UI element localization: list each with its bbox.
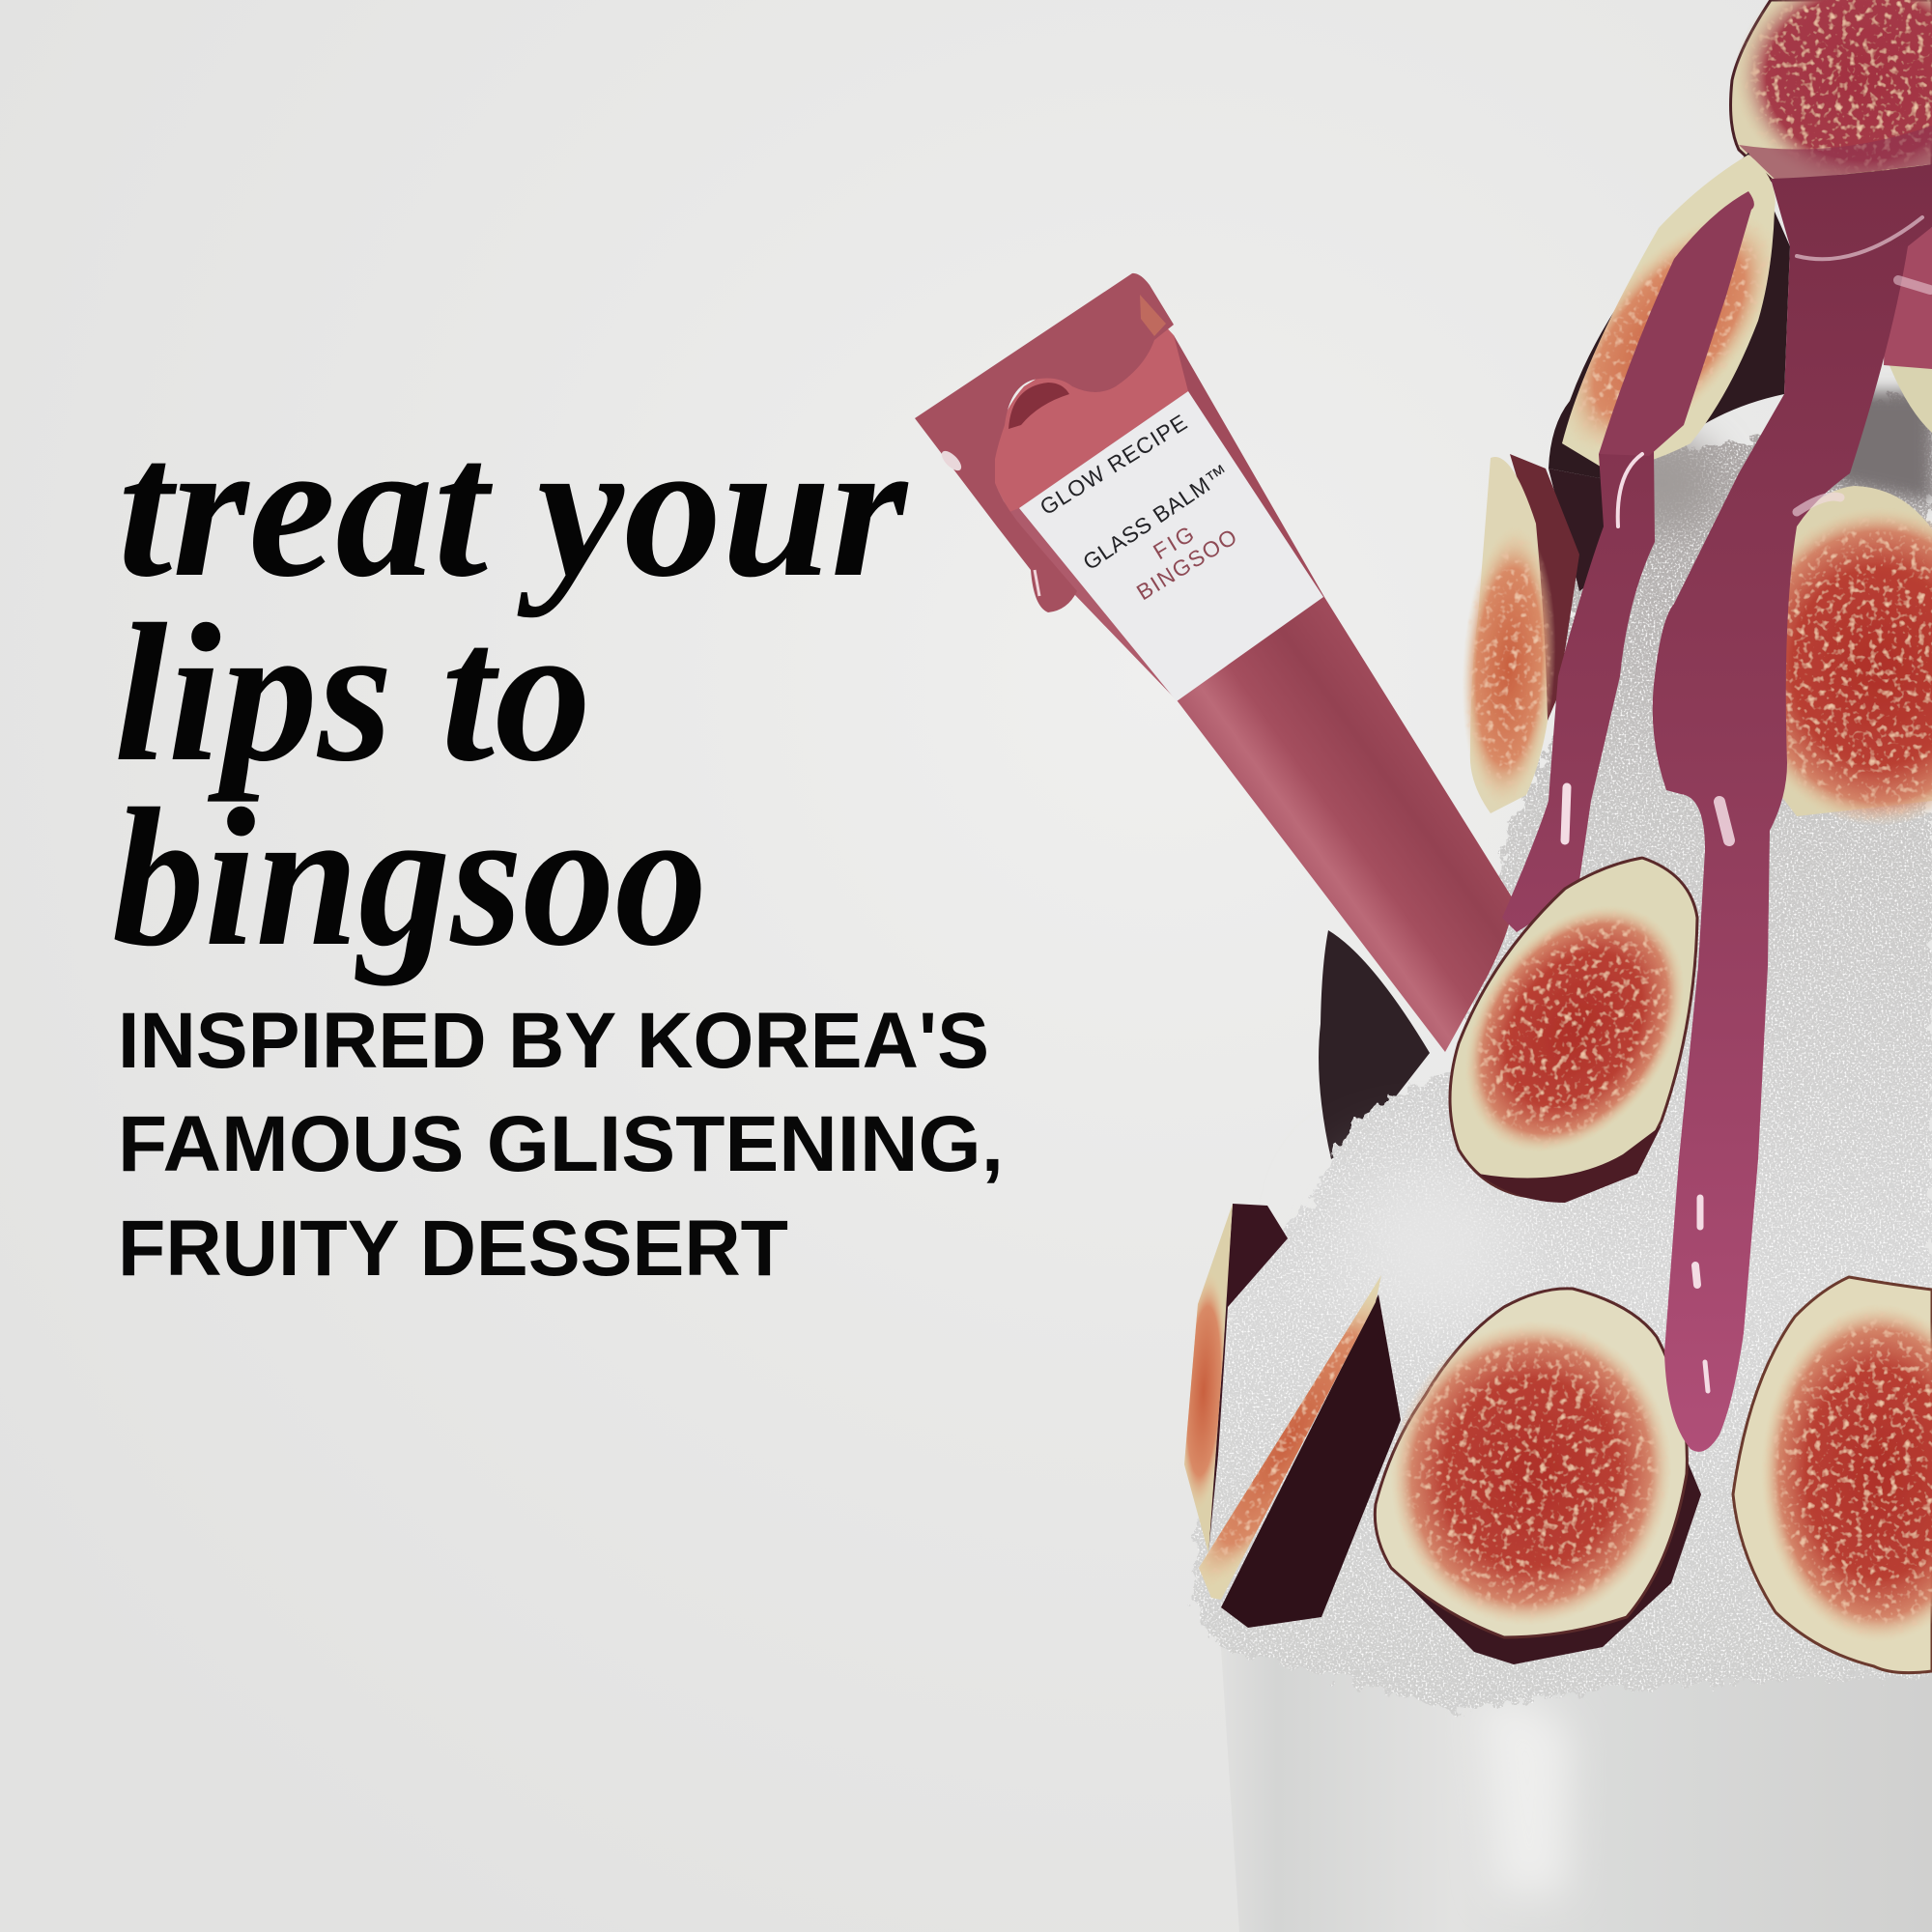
crimp edge highlight <box>1140 295 1166 336</box>
fig: upper slice <box>1548 153 1790 478</box>
headline: treat your <box>118 399 909 618</box>
bright snow clump <box>1343 1169 1517 1323</box>
figs <box>1160 0 1932 1673</box>
brand name: GLOW RECIPE <box>1036 410 1191 520</box>
glaze: top band and main flow <box>1653 164 1932 1452</box>
subheading: FRUITY DESSERT <box>118 1205 788 1293</box>
fig: top right <box>1731 0 1932 188</box>
grey snow under fruit <box>1835 391 1932 502</box>
glass highlight <box>1478 1698 1570 1893</box>
fig: bottom right <box>1733 1277 1932 1673</box>
glaze over tube crimp <box>915 273 1174 612</box>
edge highlight <box>939 448 964 473</box>
drip highlight <box>1035 570 1039 596</box>
fig: leaning slice left <box>1174 1204 1288 1553</box>
product tube <box>915 273 1514 1052</box>
headline: lips to <box>114 583 591 803</box>
subheading <box>118 997 1004 1293</box>
tube body <box>997 335 1514 1052</box>
fig: leaning slice front <box>1199 1275 1401 1628</box>
fig: bottom centre <box>1362 1289 1701 1664</box>
shade name line one: FIG <box>1149 521 1198 564</box>
balm glaze drips <box>1502 164 1932 1452</box>
headline: bingsoo <box>112 768 707 987</box>
fig: centre front <box>1419 858 1730 1203</box>
frosted glass <box>1220 1633 1932 1932</box>
glaze: on upper slice <box>1599 191 1754 456</box>
glaze: left stream <box>1502 449 1655 932</box>
grey snow beside stream <box>1604 435 1719 531</box>
ice mound <box>1193 386 1932 1710</box>
fig: narrow slice <box>1455 454 1579 813</box>
dark fig behind tube <box>1319 930 1430 1159</box>
dark skin under upper slice <box>1548 469 1610 591</box>
fig: right with glaze <box>1739 486 1932 826</box>
headline <box>112 399 909 987</box>
nozzle ring <box>1009 383 1069 429</box>
tube label <box>1019 391 1323 701</box>
product name: GLASS BALM™ <box>1078 459 1234 575</box>
glaze: top right sheen <box>1884 227 1932 369</box>
shade name line two: BINGSOO <box>1132 524 1241 605</box>
glaze highlights <box>1565 217 1930 1391</box>
coral tube shoulder <box>993 309 1188 512</box>
fig: small right edge <box>1889 363 1932 433</box>
shaved ice dessert <box>1193 386 1932 1932</box>
subheading: FAMOUS GLISTENING, <box>118 1100 1004 1188</box>
subheading: INSPIRED BY KOREA'S <box>118 997 989 1085</box>
